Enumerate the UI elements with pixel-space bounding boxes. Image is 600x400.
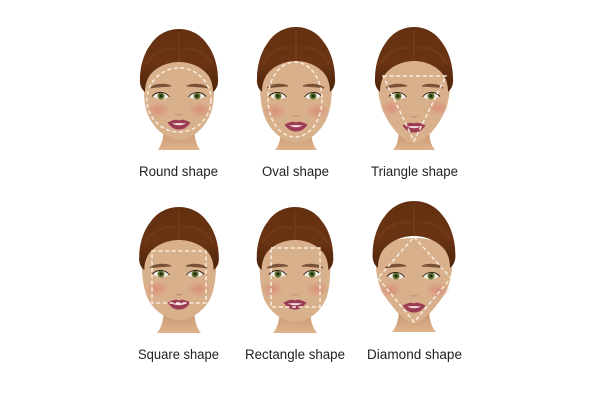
- label: diamond shape: Diamond shape: [367, 347, 462, 362]
- face: square shape: [139, 207, 219, 333]
- label: round shape: Round shape: [139, 164, 218, 179]
- face: diamond shape: [373, 201, 455, 332]
- face: round shape: [140, 29, 218, 150]
- label: oval shape: Oval shape: [262, 164, 329, 179]
- face: oval shape: [257, 27, 335, 150]
- label: square shape: Square shape: [138, 347, 219, 362]
- face: triangle shape: [375, 27, 453, 150]
- face: rectangle shape: [257, 207, 333, 333]
- label: rectangle shape: Rectangle shape: [245, 347, 345, 362]
- label: triangle shape: Triangle shape: [371, 164, 458, 179]
